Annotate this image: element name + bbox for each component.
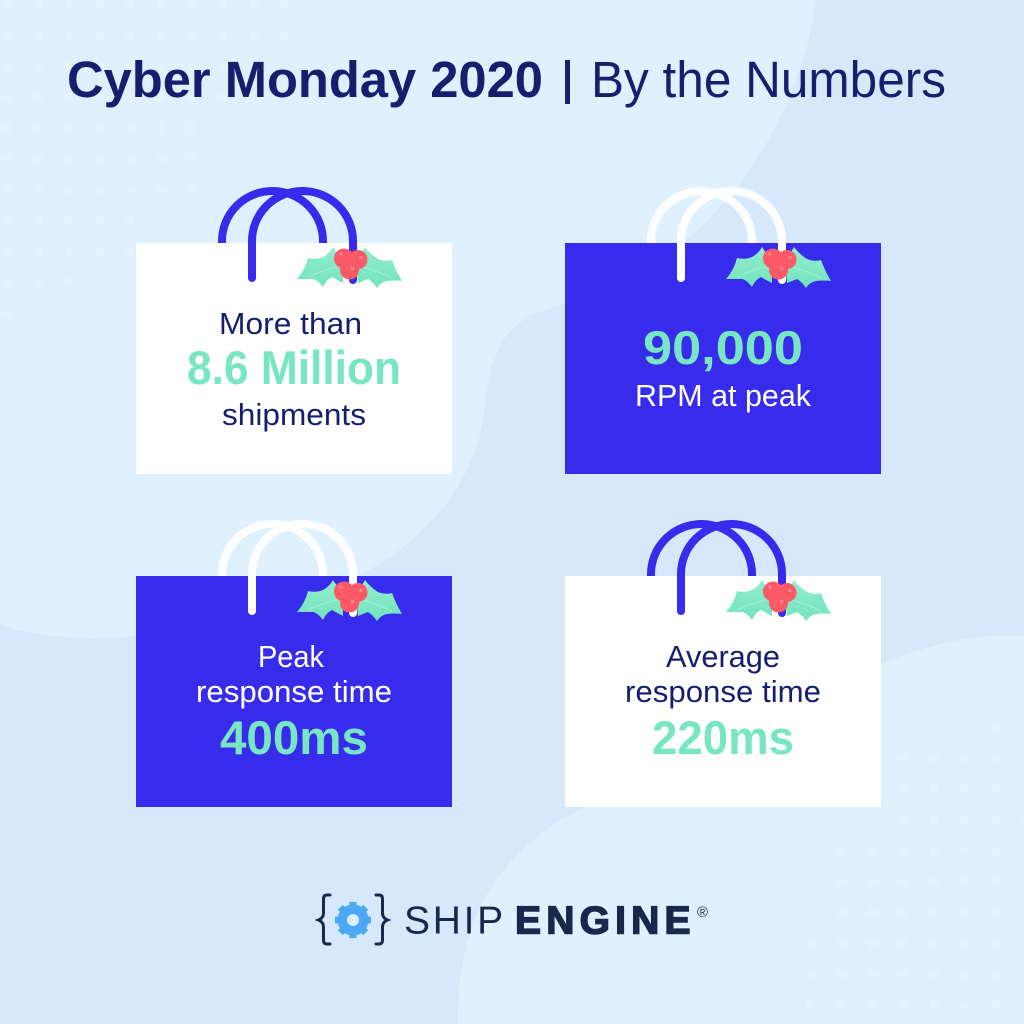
icon: holly — [297, 247, 402, 288]
logo: ShipEngine — [318, 895, 708, 944]
icon: holly — [726, 580, 831, 621]
text: shipments: shipments — [222, 397, 366, 432]
logo: ShipEngine: ENGINE — [515, 900, 696, 942]
text: response time: response time — [196, 674, 392, 709]
bag handles — [651, 191, 782, 243]
icon: holly — [297, 580, 402, 621]
text: response time: response time — [625, 674, 821, 709]
panel: RPM bag — [565, 191, 881, 474]
panel: shipments bag — [136, 191, 452, 474]
stat: 400ms: 400ms — [220, 711, 368, 764]
panel: average response bag — [565, 524, 881, 807]
text: RPM at peak: RPM at peak — [635, 378, 811, 413]
bag handles — [651, 524, 782, 576]
title — [67, 51, 946, 108]
text: average: Average — [666, 639, 780, 674]
title: Cyber Monday 2020 — [67, 51, 543, 108]
icon: holly — [726, 247, 831, 288]
panel: peak response bag — [136, 524, 452, 807]
wordmark: SHIP — [404, 900, 506, 942]
logo: ShipEngine: ® — [697, 904, 708, 921]
icon: braces — [318, 895, 388, 944]
bag handles — [222, 191, 353, 243]
stat: 220ms: 220ms — [652, 711, 794, 764]
stat: 8.6 million: 8.6 Million — [187, 341, 401, 394]
stat: 90,000: 90,000 — [643, 321, 803, 374]
bag handles — [222, 524, 353, 576]
title: By the Numbers — [591, 51, 946, 108]
text: more than: More than — [219, 306, 362, 341]
text: peak: Peak — [258, 639, 324, 674]
icon: gear — [335, 902, 371, 938]
